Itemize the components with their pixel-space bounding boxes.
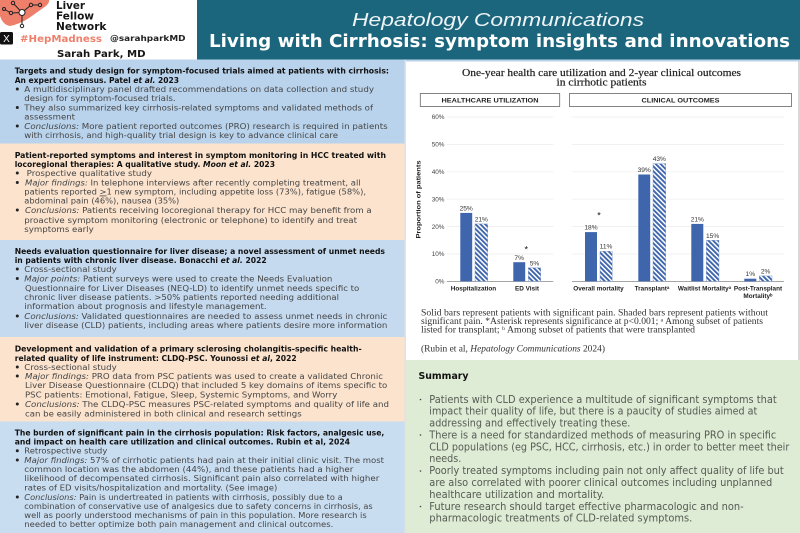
title banner: Hepatology Communications	[352, 10, 644, 30]
bullets	[16, 85, 388, 140]
y axis: Proportion of patients	[416, 160, 422, 238]
category labels: Post-Transplant	[734, 286, 783, 293]
bullets: likelihood of decompensated cirrhosis. Significant pain also correlated with higher	[24, 474, 380, 483]
value labels: 15%	[706, 233, 719, 240]
summary bullets: Future research should target effective pharmacologic and non-	[429, 501, 744, 513]
summary heading: Summary	[418, 371, 469, 382]
title banner: Living with Cirrhosis: symptom insights and innovations	[209, 31, 790, 52]
twitter handle: @sarahparkMD	[110, 34, 186, 43]
bar chart section header: healthcare utilization: HEALTHCARE UTILIZATION	[442, 98, 539, 104]
bullets: chronic liver disease patients. >50% patients reported needing additional	[24, 293, 339, 302]
icon: X	[0, 32, 13, 45]
chart caption: significant pain. *Asterisk represents significance at p<0.001; ᵃ Among subset of patients	[421, 316, 764, 326]
summary bullets: Poorly treated symptoms including pain not only affect quality of life but	[429, 465, 784, 477]
category labels: Mortalityᵇ	[743, 293, 773, 300]
bullets: Retrospective study	[24, 447, 108, 456]
heading: Patient-reported symptoms and interest in symptom monitoring in HCC treated with	[15, 151, 386, 160]
bar chart section header: healthcare utilization	[420, 94, 560, 106]
heading: in patients with chronic liver disease. Bonacchi et al. 2022	[15, 256, 267, 265]
value labels: 7%	[514, 255, 524, 262]
bullets: PSC patients: Emotional, Fatigue, Sleep, Systemic Symptoms, and Worry	[25, 390, 338, 400]
summary bullets: There is a need for standardized methods of measuring PRO in specific	[428, 430, 777, 442]
category labels: Transplantᵃ	[635, 286, 670, 293]
top strip	[0, 60, 800, 62]
heading	[15, 344, 362, 363]
bullets: Questionnaire for Liver Diseases (NEQ-LD) to identify unmet needs specific to	[25, 284, 359, 293]
logo block	[0, 0, 186, 60]
bullets: Conclusions: The CLDQ-PSC measures PSC-related symptoms and quality of life and	[25, 400, 389, 409]
summary bullets	[420, 394, 790, 524]
panel: Younossi 2022	[0, 337, 405, 422]
heading	[15, 151, 386, 169]
y axis: 60%	[432, 114, 445, 121]
panel: Moon 2023	[0, 144, 405, 240]
y axis: 30%	[432, 196, 445, 203]
value labels: *	[525, 244, 529, 254]
panel: Bonacchi 2022	[0, 240, 405, 337]
summary bullets: impact their quality of life, but there is a paucity of studies aimed at	[429, 406, 757, 418]
summary bullets: addressing and effectively treating these.	[429, 418, 630, 430]
bar chart	[416, 114, 784, 300]
value labels	[460, 156, 771, 278]
heading	[15, 66, 389, 85]
heading: Needs evaluation questionnaire for liver disease; a novel assessment of unmet needs	[15, 247, 385, 256]
author: Sarah Park, MD	[57, 49, 146, 60]
bullets: assessment	[24, 112, 75, 122]
bullets: Major findings: PRO data from PSC patients was used to create a validated Chronic	[25, 372, 383, 381]
bullets: Prospective qualitative study	[27, 169, 152, 178]
hashtag: #HepMadness	[20, 34, 102, 45]
bullets: common location was the abdomen (44%), and these patients had a higher	[24, 465, 354, 474]
logo wordmark: Network	[56, 21, 108, 33]
bullets: combination of conservative use of analgesics due to safety concerns in cirrhosis, as	[24, 502, 373, 511]
logo wordmark: Liver	[56, 0, 86, 12]
value labels: 11%	[600, 244, 612, 251]
summary bullets: Patients with CLD experience a multitude of significant symptoms that	[429, 394, 777, 406]
bullets: design for symptom-focused trials.	[24, 94, 176, 103]
bullets: Major findings: 57% of cirrhotic patients had pain at their initial clinic visit. The most	[24, 456, 384, 465]
category labels: Hospitalization	[451, 286, 496, 293]
bullets: Conclusions: Validated questionnaires are needed to assess unmet needs in chronic	[24, 312, 387, 321]
y axis: 20%	[432, 224, 445, 231]
heading: An expert consensus. Patel et al. 2023	[15, 76, 179, 85]
heading: Targets and study design for symptom-focused trials aimed at patients with cirrhosis:	[15, 66, 389, 76]
y axis: 0%	[435, 279, 445, 286]
value labels: 2%	[761, 268, 771, 275]
bullets: A multidisciplinary panel drafted recommendations on data collection and study	[24, 85, 374, 94]
value labels: 25%	[460, 206, 473, 212]
title banner	[197, 0, 800, 60]
y axis: 50%	[432, 142, 445, 149]
category labels: Overall mortality	[573, 286, 624, 293]
logo wordmark: Fellow	[56, 10, 94, 22]
panel: chart figure	[404, 60, 800, 533]
bullets: well as poorly understood mechanisms of pain in this population. More research is	[24, 511, 367, 520]
summary bullets: needs.	[429, 453, 461, 465]
bullets: information about prognosis and lifestyle management.	[24, 302, 267, 311]
bullets	[16, 447, 384, 529]
bullets	[16, 363, 389, 418]
bullets: needed to better optimize both pain management and clinical outcomes.	[24, 520, 333, 529]
bar chart section header: clinical outcomes	[570, 94, 792, 106]
heading	[15, 247, 385, 265]
value labels: 21%	[475, 216, 488, 224]
bullets: with cirrhosis, and high-quality trial design is key to advance clinical care	[24, 131, 338, 140]
bullets: patients reported >1 new symptom, including appetite loss (73%), fatigue (58%),	[24, 188, 366, 196]
bullets: proactive symptom monitoring (electronic or telephone) to identify and treat	[24, 216, 357, 225]
chart caption: Solid bars represent patients with significant pain. Shaded bars represent patients without	[421, 308, 769, 318]
value labels: 1%	[746, 271, 755, 278]
y axis	[416, 114, 445, 286]
chart caption	[421, 308, 769, 354]
bullets	[16, 169, 372, 234]
logo wordmark	[56, 0, 108, 33]
summary bullets: are also correlated with poorer clinical outcomes including unplanned	[429, 477, 772, 489]
value labels: 18%	[584, 224, 598, 232]
icon: X: X	[3, 34, 10, 45]
bullets: Cross-sectional study	[24, 265, 117, 274]
bullets: Conclusions: Pain is undertreated in patients with cirrhosis, possibly due to a	[24, 493, 343, 502]
value labels: *	[597, 210, 601, 220]
shaded bars	[475, 164, 772, 281]
value labels: 5%	[530, 260, 539, 268]
bullets: symptoms early	[24, 225, 94, 234]
bullets: Conclusions: More patient reported outcomes (PRO) research is required in patients	[24, 122, 388, 131]
category labels	[451, 286, 783, 300]
bullets: Liver Disease Questionnaire (CLDQ) that included 5 key domains of items specific to	[25, 381, 387, 390]
heading: and impact on health care utilization and clinical outcomes. Rubin et al, 2024	[15, 438, 350, 447]
chart caption: listed for transplant; ᵇ Among subset of patients that were transplanted	[421, 324, 696, 334]
heading: related quality of life instrument: CLDQ-PSC. Younossi et al, 2022	[15, 354, 297, 363]
panel: summary	[406, 360, 800, 533]
category labels: Waitlist Mortalityᵃ	[678, 286, 732, 293]
bullets: They also summarized key cirrhosis-related symptoms and validated methods of	[23, 104, 373, 112]
bullets	[16, 265, 387, 330]
value labels: 43%	[653, 156, 666, 163]
bullets: rates of ED visits/hospitalization and mortality. (See image)	[24, 484, 277, 493]
heading: locoregional therapies: A qualitative study. Moon et al. 2023	[15, 160, 275, 169]
heading	[15, 428, 384, 447]
chart title	[462, 68, 741, 88]
solid bars	[460, 174, 756, 281]
bullets: liver disease (CLD) patients, including areas where patients desire more information	[24, 321, 387, 330]
bullets: Major findings: In telephone interviews after recently completing treatment, all	[25, 178, 361, 188]
value labels: 21%	[691, 216, 704, 224]
y axis: 40%	[432, 169, 445, 176]
icon: liver network	[0, 0, 49, 28]
summary bullets: pharmacologic treatments of CLD-related symptoms.	[429, 512, 692, 524]
panel: Rubin 2024	[0, 422, 405, 533]
panel: Patel 2023	[0, 60, 405, 144]
chart caption: (Rubin et al, Hepatology Communications 2024)	[421, 344, 605, 354]
bullets: Cross-sectional study	[24, 363, 117, 372]
value labels: 39%	[638, 167, 651, 174]
bullets: Conclusions: Patients receiving locoregional therapy for HCC may benefit from a	[25, 206, 372, 215]
y axis: 10%	[432, 251, 445, 258]
bullets: abdominal pain (46%), nausea (35%)	[24, 196, 179, 206]
category labels: ED Visit	[515, 286, 540, 293]
heading: Development and validation of a primary sclerosing cholangitis-specific health-	[15, 344, 362, 354]
bullets: Major points: Patient surveys were used to create the Needs Evaluation	[24, 274, 332, 284]
chart title: One-year health care utilization and 2-year clinical outcomes	[462, 68, 741, 79]
bar chart section header: clinical outcomes: CLINICAL OUTCOMES	[642, 98, 720, 104]
summary bullets: healthcare utilization and mortality.	[429, 489, 604, 501]
bullets: can be easily administered in both clinical and research settings	[25, 410, 302, 418]
heading: The burden of significant pain in the cirrhosis population: Risk factors, analgesic use,	[15, 428, 384, 438]
chart title: in cirrhotic patients	[556, 78, 647, 88]
